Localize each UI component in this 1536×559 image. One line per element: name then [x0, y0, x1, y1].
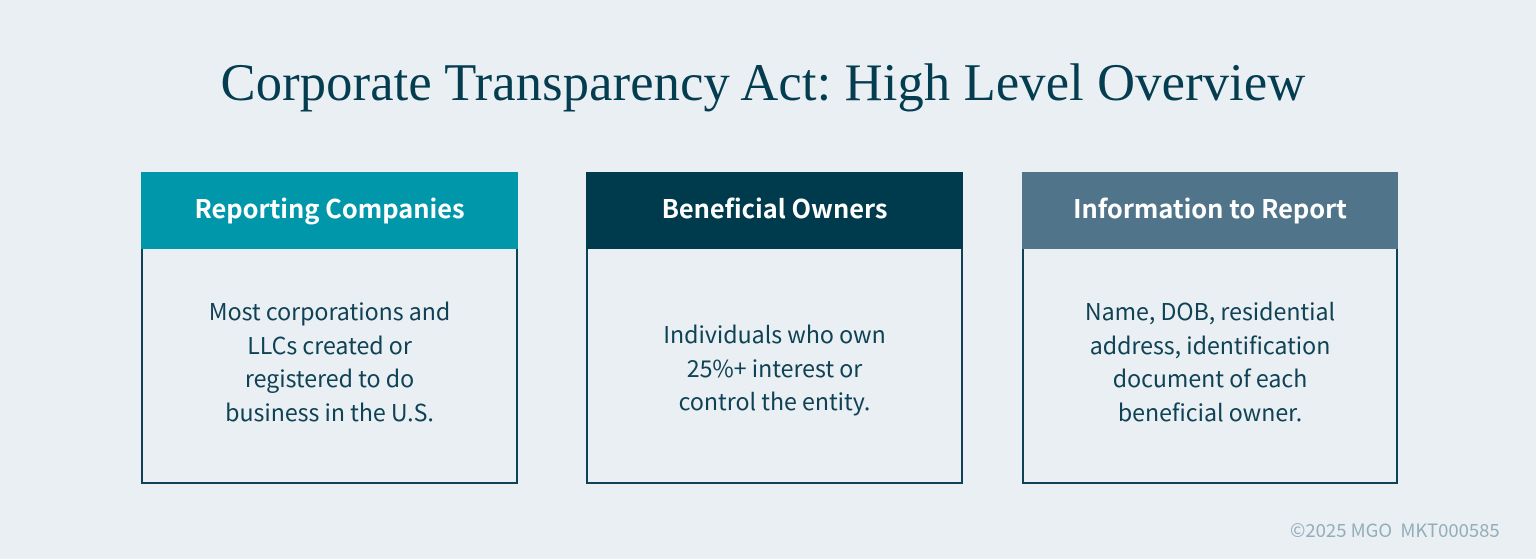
text: reporting companies description: Most corporations and: [209, 293, 450, 327]
heading: reporting companies: [141, 172, 518, 249]
text: reporting companies description: [209, 293, 450, 428]
text: beneficial owners description: [663, 316, 886, 417]
text: information to report description: address, identification: [1090, 327, 1330, 361]
panel: beneficial owners: [586, 172, 963, 484]
text: reporting companies description: LLCs created or: [247, 327, 412, 361]
text: information to report description: Name, DOB, residential: [1085, 293, 1335, 327]
panel: reporting companies: [141, 172, 518, 484]
panel: information to report: [1022, 172, 1398, 484]
heading: beneficial owners: [586, 172, 963, 249]
panel body outline: [141, 248, 518, 484]
text: information to report description: [1085, 293, 1335, 428]
heading: beneficial owners: Beneficial Owners: [662, 190, 887, 226]
text: reporting companies description: business in the U.S.: [225, 394, 434, 428]
title: Corporate Transparency Act: High Level Overview: [221, 54, 1305, 112]
panel body outline: [586, 248, 963, 484]
footer copyright: ©2025 MGO MKT000585: [1290, 517, 1500, 543]
heading: information to report: Information to Report: [1073, 190, 1347, 226]
text: information to report description: document of each: [1113, 360, 1307, 394]
panel body outline: [1022, 248, 1398, 484]
text: reporting companies description: registered to do: [245, 360, 414, 394]
text: information to report description: beneficial owner.: [1118, 394, 1302, 428]
text: beneficial owners description: 25%+ interest or: [687, 350, 862, 384]
heading: information to report: [1022, 172, 1398, 249]
text: beneficial owners description: Individuals who own: [663, 316, 886, 350]
heading: reporting companies: Reporting Companies: [194, 190, 465, 226]
text: beneficial owners description: control the entity.: [679, 383, 870, 417]
